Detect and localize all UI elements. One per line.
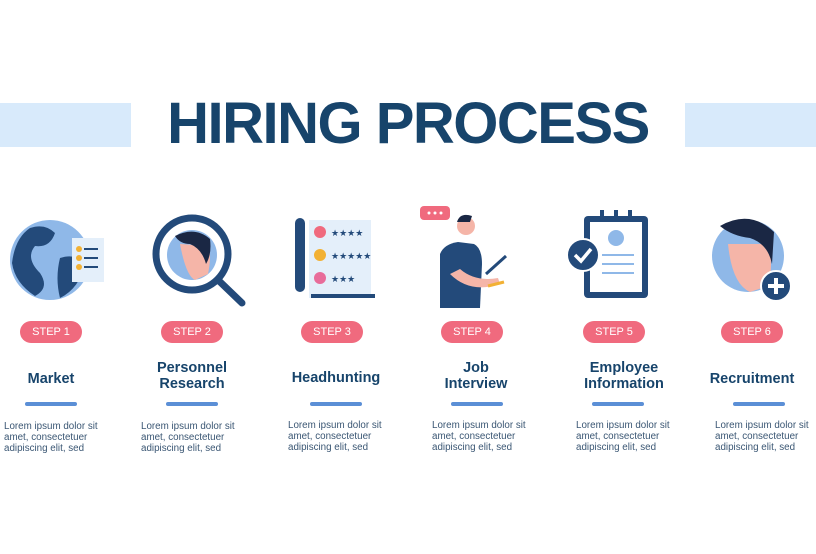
icon: candidate list: ★★★★★ xyxy=(331,251,371,261)
step 4 xyxy=(432,321,526,453)
pill: STEP 4 xyxy=(453,326,491,338)
decorative right bar xyxy=(685,103,816,147)
title: HIRING PROCESS xyxy=(167,91,649,156)
icon: employee information clipboard xyxy=(568,210,648,298)
pill xyxy=(161,321,223,343)
pill xyxy=(301,321,363,343)
icon: job interview person xyxy=(420,206,507,308)
heading xyxy=(445,360,508,392)
icon: candidate list: ★★★★ xyxy=(331,228,363,238)
heading: Market xyxy=(28,371,74,387)
step 5 xyxy=(576,321,670,453)
icon: candidate list xyxy=(295,218,375,298)
heading: Personnel xyxy=(157,360,227,376)
heading: Recruitment xyxy=(710,371,794,387)
step 6 xyxy=(710,321,809,453)
heading xyxy=(584,360,664,392)
pill xyxy=(583,321,645,343)
icon: recruitment person plus xyxy=(712,218,790,300)
pill xyxy=(441,321,503,343)
step 1 xyxy=(4,321,98,454)
step 2 xyxy=(141,321,235,454)
text: Lorem ipsum dolor sit amet, consectetuer adipiscing elit, sed xyxy=(432,420,526,453)
heading: Interview xyxy=(445,376,507,392)
icon: magnifier with person xyxy=(152,214,246,306)
heading: Research xyxy=(159,376,225,392)
heading: Headhunting xyxy=(292,370,380,386)
text: Lorem ipsum dolor sit amet, consectetuer adipiscing elit, sed xyxy=(141,421,235,454)
heading: Job xyxy=(463,360,489,376)
decorative left bar xyxy=(0,103,131,147)
heading: Employee xyxy=(590,360,658,376)
text: Lorem ipsum dolor sit amet, consectetuer adipiscing elit, sed xyxy=(576,420,670,453)
pill: STEP 3 xyxy=(313,326,351,338)
pill: STEP 5 xyxy=(595,326,633,338)
text: Lorem ipsum dolor sit amet, consectetuer adipiscing elit, sed xyxy=(4,421,98,454)
heading: Information xyxy=(584,376,664,392)
pill xyxy=(20,321,82,343)
text: Lorem ipsum dolor sit amet, consectetuer adipiscing elit, sed xyxy=(715,420,809,453)
pill: STEP 6 xyxy=(733,326,771,338)
icon: globe with checklist xyxy=(10,220,104,300)
step 3 xyxy=(288,321,382,453)
heading xyxy=(157,360,227,392)
pill: STEP 2 xyxy=(173,326,211,338)
pill xyxy=(721,321,783,343)
icon: candidate list: ★★★ xyxy=(331,274,355,284)
pill: STEP 1 xyxy=(32,326,70,338)
text: Lorem ipsum dolor sit amet, consectetuer adipiscing elit, sed xyxy=(288,420,382,453)
